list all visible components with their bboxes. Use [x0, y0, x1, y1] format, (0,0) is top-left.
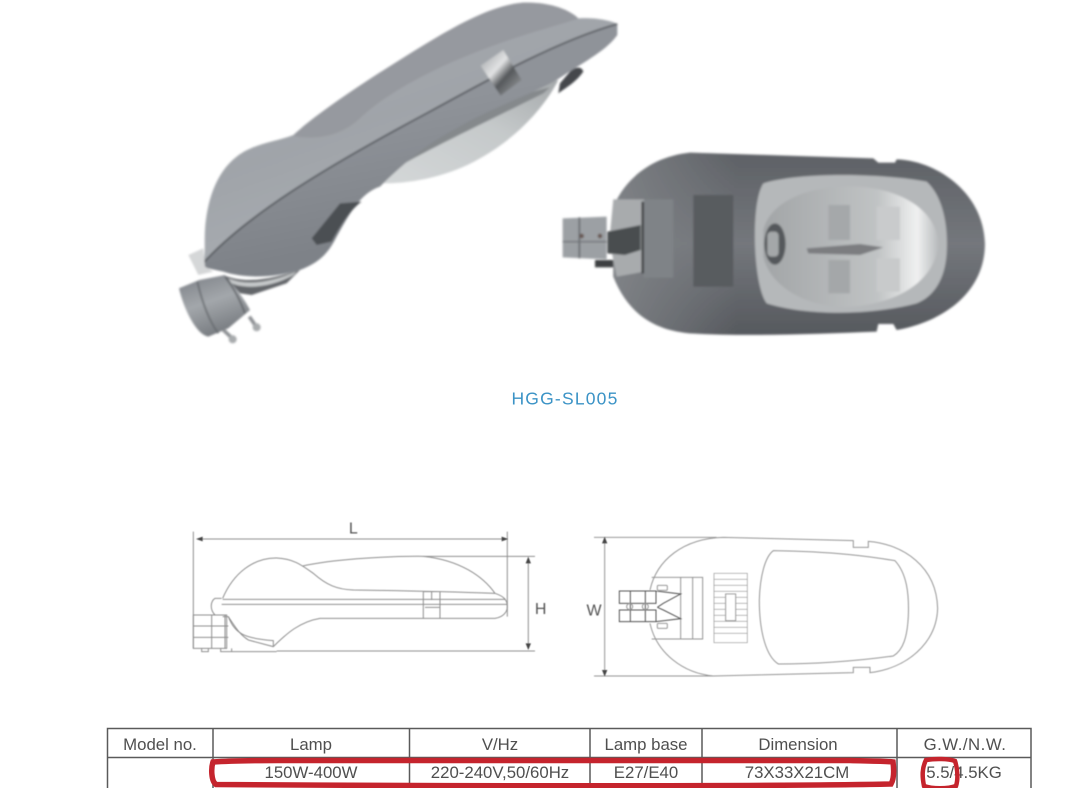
- seam line: [200, 24, 617, 267]
- photo: street lamp side view: [179, 3, 617, 343]
- header row: Model no.: [123, 735, 197, 754]
- bolts: [223, 317, 257, 340]
- data row: 220-240V,50/60Hz: [431, 763, 569, 782]
- data row: 5.5/4.5KG: [926, 763, 1002, 782]
- table grid: [107, 728, 1031, 788]
- L dimension: L: [349, 520, 358, 537]
- reflector facets: [828, 205, 850, 240]
- header row: Lamp: [290, 735, 332, 754]
- diagram: top plan with W dimension: [586, 537, 938, 677]
- specification table: [107, 728, 1031, 788]
- mounting block: [619, 591, 681, 622]
- lamp holder: [764, 223, 786, 265]
- white bracket: [188, 248, 213, 275]
- bracket under the housing: [223, 270, 300, 295]
- chrome clip: [481, 50, 522, 96]
- red highlight around lamp specs: [212, 760, 894, 786]
- L dimension: [193, 520, 508, 648]
- data row: 150W-400W: [265, 763, 358, 782]
- vent: [714, 573, 747, 643]
- lens outline: [759, 551, 908, 664]
- housing outline: [650, 537, 938, 676]
- dark rear slot: [558, 68, 583, 93]
- H dimension: H: [535, 601, 546, 618]
- mounting plate: [643, 199, 673, 278]
- dark underside panel: [312, 202, 362, 245]
- data row: E27/E40: [614, 763, 678, 782]
- data row: 73X33X21CM: [745, 763, 849, 782]
- lens surround: [755, 175, 947, 313]
- lens seen from the side: [367, 80, 558, 183]
- mount outline: [193, 598, 277, 652]
- W dimension: [586, 537, 717, 677]
- mounting cylinder: [179, 275, 250, 337]
- header row: [123, 735, 1006, 754]
- housing: [613, 153, 985, 335]
- upper dome: [200, 3, 617, 267]
- lens: [763, 187, 938, 307]
- data row: [265, 763, 1002, 782]
- header row: G.W./N.W.: [924, 735, 1006, 754]
- W dimension: W: [586, 602, 602, 619]
- mount plate: [652, 577, 703, 639]
- lower housing: [200, 24, 617, 276]
- header row: Lamp base: [604, 735, 688, 754]
- header row: V/Hz: [482, 735, 518, 754]
- model label: HGG-SL005: [511, 388, 619, 408]
- H dimension: [277, 556, 546, 651]
- lighter left shoulder: [613, 153, 737, 335]
- darker dome panel: [293, 3, 578, 137]
- mounting cylinder: [563, 217, 607, 259]
- lamp outline: [222, 556, 507, 647]
- bolt housing: [595, 260, 613, 267]
- photo: street lamp underside view: [563, 153, 985, 335]
- diagram: side elevation with L and H dimensions: [193, 520, 546, 652]
- darker vent panel: [693, 195, 733, 287]
- header row: Dimension: [758, 735, 838, 754]
- red highlight around gross weight: [923, 759, 957, 788]
- reflector strip inside the lens: [380, 87, 550, 178]
